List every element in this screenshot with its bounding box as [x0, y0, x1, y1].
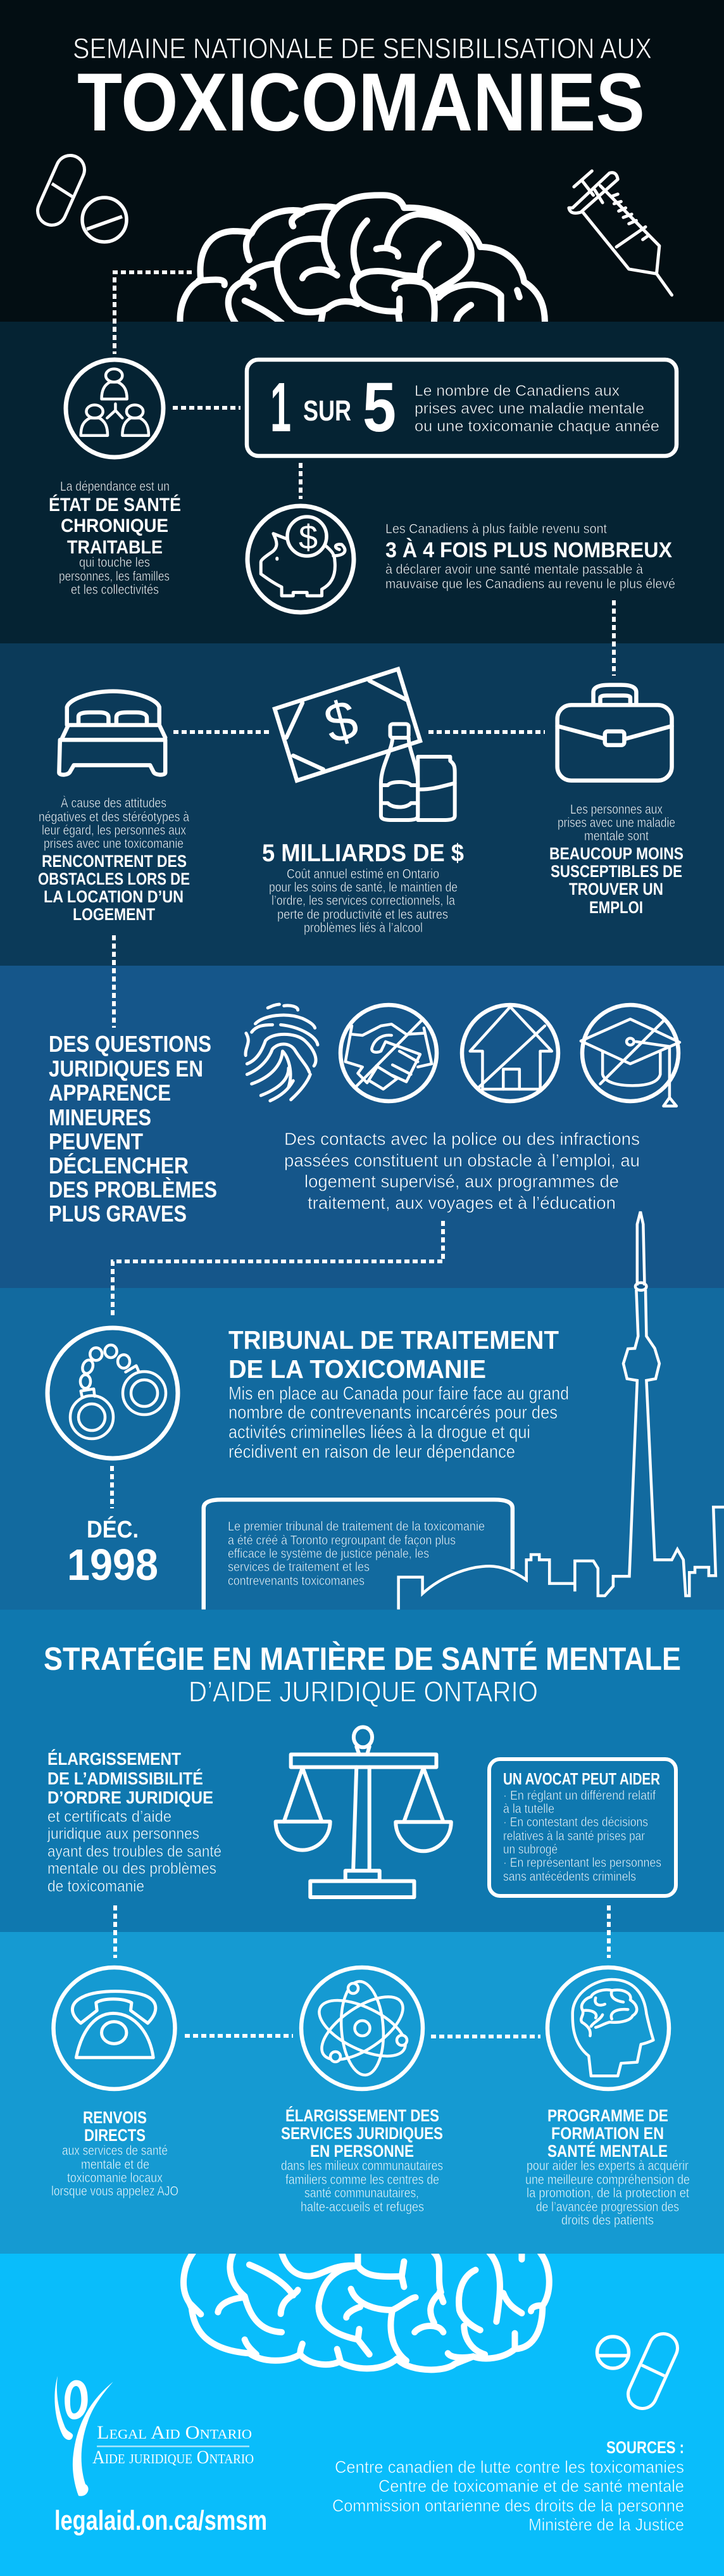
connector: text to tribunal [113, 1221, 443, 1317]
text: training program [525, 2106, 690, 2228]
icon: handcuffs [47, 1328, 178, 1458]
text: income stat: Les Canadiens à plus faible revenu sont [385, 522, 607, 536]
text: employment: SUSCEPTIBLES DE [551, 862, 682, 881]
text: five billion: l’ordre, les services correctionnels, la [272, 893, 455, 908]
text: sources [332, 2438, 684, 2534]
panel: drug treatment court [0, 1211, 724, 1610]
text: in-person services: dans les milieux communautaires [281, 2159, 443, 2173]
text: employment: EMPLOI [589, 898, 643, 917]
text: chronic condition [49, 479, 181, 597]
icon: no housing [462, 1005, 558, 1101]
icon: atom [301, 1967, 423, 2089]
callout: lawyer can help: à la tutelle [503, 1802, 554, 1816]
callout: 1 sur 5: ou une toxicomanie chaque année [415, 418, 659, 435]
text: income stat: à déclarer avoir une santé mentale passable à [385, 562, 643, 577]
text: housing barriers: LOGEMENT [73, 905, 155, 924]
heading: legal questions [49, 1031, 217, 1227]
icon: no education [581, 1005, 680, 1106]
icon: piggy bank [247, 506, 354, 612]
logo: Legal Aid Ontario: Aide juridique Ontario [92, 2447, 254, 2468]
text: in-person services: EN PERSONNE [310, 2142, 414, 2161]
text: chronic condition: qui touche les [79, 555, 150, 570]
text: employment: BEAUCOUP MOINS [549, 844, 683, 863]
panel: one in five [0, 272, 724, 643]
text: first court [228, 1520, 485, 1588]
heading: legal questions: DES QUESTIONS [49, 1031, 211, 1057]
text: training program: SANTÉ MENTALE [547, 2141, 668, 2161]
icon: fingerprint [246, 1004, 318, 1101]
text: police contacts: traitement, aux voyages et à l’éducation [308, 1193, 616, 1213]
text: police contacts [284, 1129, 640, 1213]
text: tribunal description [228, 1384, 569, 1462]
skyline: Toronto with CN Tower [399, 1211, 724, 1610]
text: direct referrals [51, 2108, 178, 2199]
connector: bed to money [173, 730, 272, 734]
heading: strategy: D’AIDE JURIDIQUE ONTARIO [189, 1676, 538, 1708]
text: chronic condition: CHRONIQUE [61, 515, 168, 536]
icon: bed [59, 691, 165, 775]
heading: legal questions: APPARENCE [49, 1080, 171, 1106]
heading: legal questions: DES PROBLÈMES [49, 1177, 217, 1203]
text: in-person services [281, 2106, 443, 2214]
text: five billion: 5 MILLIARDS DE $ [262, 840, 464, 867]
callout: lawyer can help: · En représentant les personnes [503, 1856, 661, 1870]
text: housing barriers: prises avec une toxicomanie [44, 837, 184, 851]
text: sources: Centre canadien de lutte contre les toxicomanies [335, 2458, 684, 2477]
connector: brain to people [115, 272, 192, 354]
text: five billion: problèmes liés à l’alcool [304, 921, 423, 935]
text: tribunal description: récidivent en raison de leur dépendance [228, 1442, 515, 1462]
panel: mental health strategy [0, 1610, 724, 1932]
text: chronic condition: personnes, les familles [59, 569, 170, 584]
icon: syringe [569, 171, 672, 295]
callout: lawyer can help [489, 1759, 676, 1896]
text: employment [549, 802, 683, 917]
callout: 1 sur 5: 5 [363, 369, 396, 446]
icon: people in circle [66, 360, 163, 457]
callout: 1 sur 5: Le nombre de Canadiens aux [415, 382, 620, 400]
text: chronic condition: La dépendance est un [60, 479, 170, 494]
panel: costs and barriers [0, 600, 724, 966]
connector: cuffs to date [110, 1466, 114, 1508]
text: direct referrals: lorsque vous appelez AJO [51, 2184, 178, 2199]
text: first court: services de traitement et les [228, 1560, 370, 1574]
text: sources: Commission ontarienne des droits de la personne [332, 2496, 684, 2515]
text: eligibility: ÉLARGISSEMENT [47, 1749, 181, 1769]
text: housing barriers: OBSTACLES LORS DE [38, 869, 190, 888]
callout: lawyer can help: relatives à la santé prises par [503, 1829, 645, 1843]
text: training program: FORMATION EN [551, 2124, 664, 2143]
text: direct referrals: toxicomanie locaux [67, 2171, 163, 2185]
icon: capsule [642, 2348, 665, 2394]
text: five billion: Coût annuel estimé en Ontario [287, 867, 439, 881]
icon: brain (top half) [180, 195, 545, 323]
text: date: DÉC. [87, 1515, 139, 1543]
text: first court: contrevenants toxicomanes [228, 1574, 365, 1588]
text: five billion: perte de productivité et les autres [277, 907, 448, 922]
connector: stat box to piggy [299, 463, 303, 499]
callout: lawyer can help: · En contestant des décisions [503, 1815, 648, 1829]
text: eligibility: et certificats d’aide [47, 1808, 172, 1826]
icon: scales of justice [276, 1727, 451, 1897]
panel: footer [0, 2252, 724, 2576]
text: five billion [262, 840, 464, 935]
connector: income to briefcase [612, 600, 616, 676]
panel: legal issues [0, 935, 724, 1288]
icon: head with brain [547, 1967, 669, 2089]
text: eligibility: D’ORDRE JURIDIQUE [47, 1788, 213, 1807]
text: police contacts: logement supervisé, aux programmes de [304, 1171, 619, 1191]
text: training program: la promotion, de la protection et [527, 2186, 689, 2200]
text: housing barriers: À cause des attitudes [61, 796, 166, 811]
panel: header [36, 38, 673, 322]
connector: lawyer to training [607, 1905, 611, 1958]
heading: tribunal: DE LA TOXICOMANIE [228, 1354, 486, 1384]
heading: legal questions: DÉCLENCHER [49, 1152, 189, 1178]
text: housing barriers: LA LOCATION D’UN [44, 887, 184, 906]
logo: Legal Aid Ontario [54, 2376, 254, 2496]
text: training program: de l’avancée progression des [536, 2200, 679, 2214]
heading: tribunal: TRIBUNAL DE TRAITEMENT [228, 1325, 559, 1354]
callout: lawyer can help: · En réglant un différend relatif [503, 1789, 656, 1803]
callout: lawyer can help: UN AVOCAT PEUT AIDER [503, 1769, 660, 1788]
icon: no handshake [340, 1005, 437, 1101]
icon: banknote and bottles [275, 669, 455, 820]
text: police contacts: passées constituent un obstacle à l’emploi, au [284, 1151, 640, 1170]
text: direct referrals: aux services de santé [62, 2144, 168, 2158]
connector: housing to legal issues [112, 935, 116, 1028]
heading: strategy [44, 1641, 681, 1708]
text: in-person services: SERVICES JURIDIQUES [281, 2124, 443, 2143]
text: employment: mentale sont [584, 829, 649, 843]
text: housing barriers: négatives et des stéréotypes à [39, 810, 189, 824]
text: first court: efficace le système de justice pénale, les [228, 1547, 429, 1561]
icon: telephone [53, 1967, 175, 2089]
connector: money to briefcase [428, 730, 545, 734]
logo: Legal Aid Ontario: Legal Aid Ontario [97, 2422, 252, 2443]
icon: capsule [52, 170, 73, 211]
text: date: 1998 [67, 1540, 158, 1589]
connector: atom to head [431, 2035, 540, 2038]
text: sources: Centre de toxicomanie et de santé mentale [378, 2477, 684, 2496]
text: eligibility: juridique aux personnes [47, 1825, 199, 1843]
connector: eligibility to referrals [113, 1905, 117, 1958]
heading: legal questions: PLUS GRAVES [49, 1201, 187, 1227]
panel: programs [0, 1905, 724, 2254]
heading: tribunal [228, 1325, 559, 1384]
text: eligibility [47, 1749, 222, 1895]
icon: briefcase [558, 685, 672, 781]
connector: phone to atom [185, 2034, 293, 2038]
text: tribunal description: activités criminelles liées à la drogue et qui [228, 1422, 530, 1443]
text: income stat [385, 522, 675, 591]
icon: round pill [82, 198, 127, 242]
text: housing barriers [38, 796, 190, 924]
icon: banknote and bottles: $ [318, 687, 364, 755]
text: direct referrals: DIRECTS [84, 2126, 146, 2145]
text: five billion: pour les soins de santé, le maintien de [269, 880, 458, 895]
text: in-person services: halte-accueils et refuges [301, 2200, 424, 2214]
text: training program: pour aider les experts à acquérir [527, 2159, 689, 2173]
text: in-person services: ÉLARGISSEMENT DES [285, 2106, 439, 2125]
text: in-person services: santé communautaires, [304, 2186, 419, 2200]
text: eligibility: DE L’ADMISSIBILITÉ [47, 1769, 203, 1788]
text: income stat: 3 À 4 FOIS PLUS NOMBREUX [385, 538, 672, 562]
text: eligibility: ayant des troubles de santé [47, 1843, 222, 1860]
text: housing barriers: leur égard, les personnes aux [42, 823, 186, 838]
text: first court: Le premier tribunal de traitement de la toxicomanie [228, 1520, 485, 1534]
heading: legal questions: JURIDIQUES EN [49, 1056, 203, 1082]
text: training program: PROGRAMME DE [547, 2106, 668, 2125]
text: website: legalaid.on.ca/smsm [54, 2505, 267, 2536]
text: direct referrals: mentale et de [81, 2157, 149, 2172]
connector: people to stat box [173, 406, 240, 410]
title line: SEMAINE NATIONALE DE SENSIBILISATION AUX [73, 32, 652, 65]
text: sources: Ministère de la Justice [528, 2515, 684, 2534]
text: police contacts: Des contacts avec la police ou des infractions [284, 1129, 640, 1149]
callout: lawyer can help: un subrogé [503, 1843, 558, 1857]
callout: 1 sur 5 [247, 360, 677, 456]
icon: round pill [597, 2337, 629, 2368]
text: chronic condition: TRAITABLE [67, 537, 163, 558]
callout: 1 sur 5: prises avec une maladie mentale [415, 400, 644, 417]
callout: first court frame [204, 1500, 513, 1610]
text: date [67, 1515, 158, 1589]
callout: lawyer can help: sans antécédents criminels [503, 1870, 636, 1884]
text: training program: droits des patients [561, 2213, 654, 2228]
text: employment: TROUVER UN [569, 880, 663, 899]
text: tribunal description: Mis en place au Canada pour faire face au grand [228, 1384, 569, 1404]
text: chronic condition: ÉTAT DE SANTÉ [49, 494, 181, 515]
text: first court: a été créé à Toronto regroupant de façon plus [228, 1534, 456, 1548]
callout: 1 sur 5: 1 [270, 369, 291, 446]
icon: piggy bank: $ [299, 519, 318, 557]
text: in-person services: familiers comme les centres de [285, 2173, 439, 2187]
text: eligibility: mentale ou des problèmes [47, 1860, 216, 1878]
main title: TOXICOMANIES [77, 56, 645, 148]
heading: legal questions: MINEURES [49, 1104, 151, 1130]
text: training program: une meilleure compréhension de [525, 2173, 690, 2187]
callout: 1 sur 5: SUR [303, 395, 351, 427]
text: employment: prises avec une maladie [558, 816, 675, 830]
text: chronic condition: et les collectivités [71, 583, 159, 597]
text: income stat: mauvaise que les Canadiens au revenu le plus élevé [385, 577, 675, 591]
icon: brain (bottom half) [184, 2252, 549, 2370]
heading: legal questions: PEUVENT [49, 1128, 143, 1154]
text: sources: SOURCES : [606, 2438, 684, 2457]
text: housing barriers: RENCONTRENT DES [42, 852, 187, 871]
text: eligibility: de toxicomanie [47, 1878, 144, 1895]
text: direct referrals: RENVOIS [83, 2108, 147, 2127]
text: employment: Les personnes aux [570, 802, 663, 817]
text: tribunal description: nombre de contrevenants incarcérés pour des [228, 1403, 558, 1423]
